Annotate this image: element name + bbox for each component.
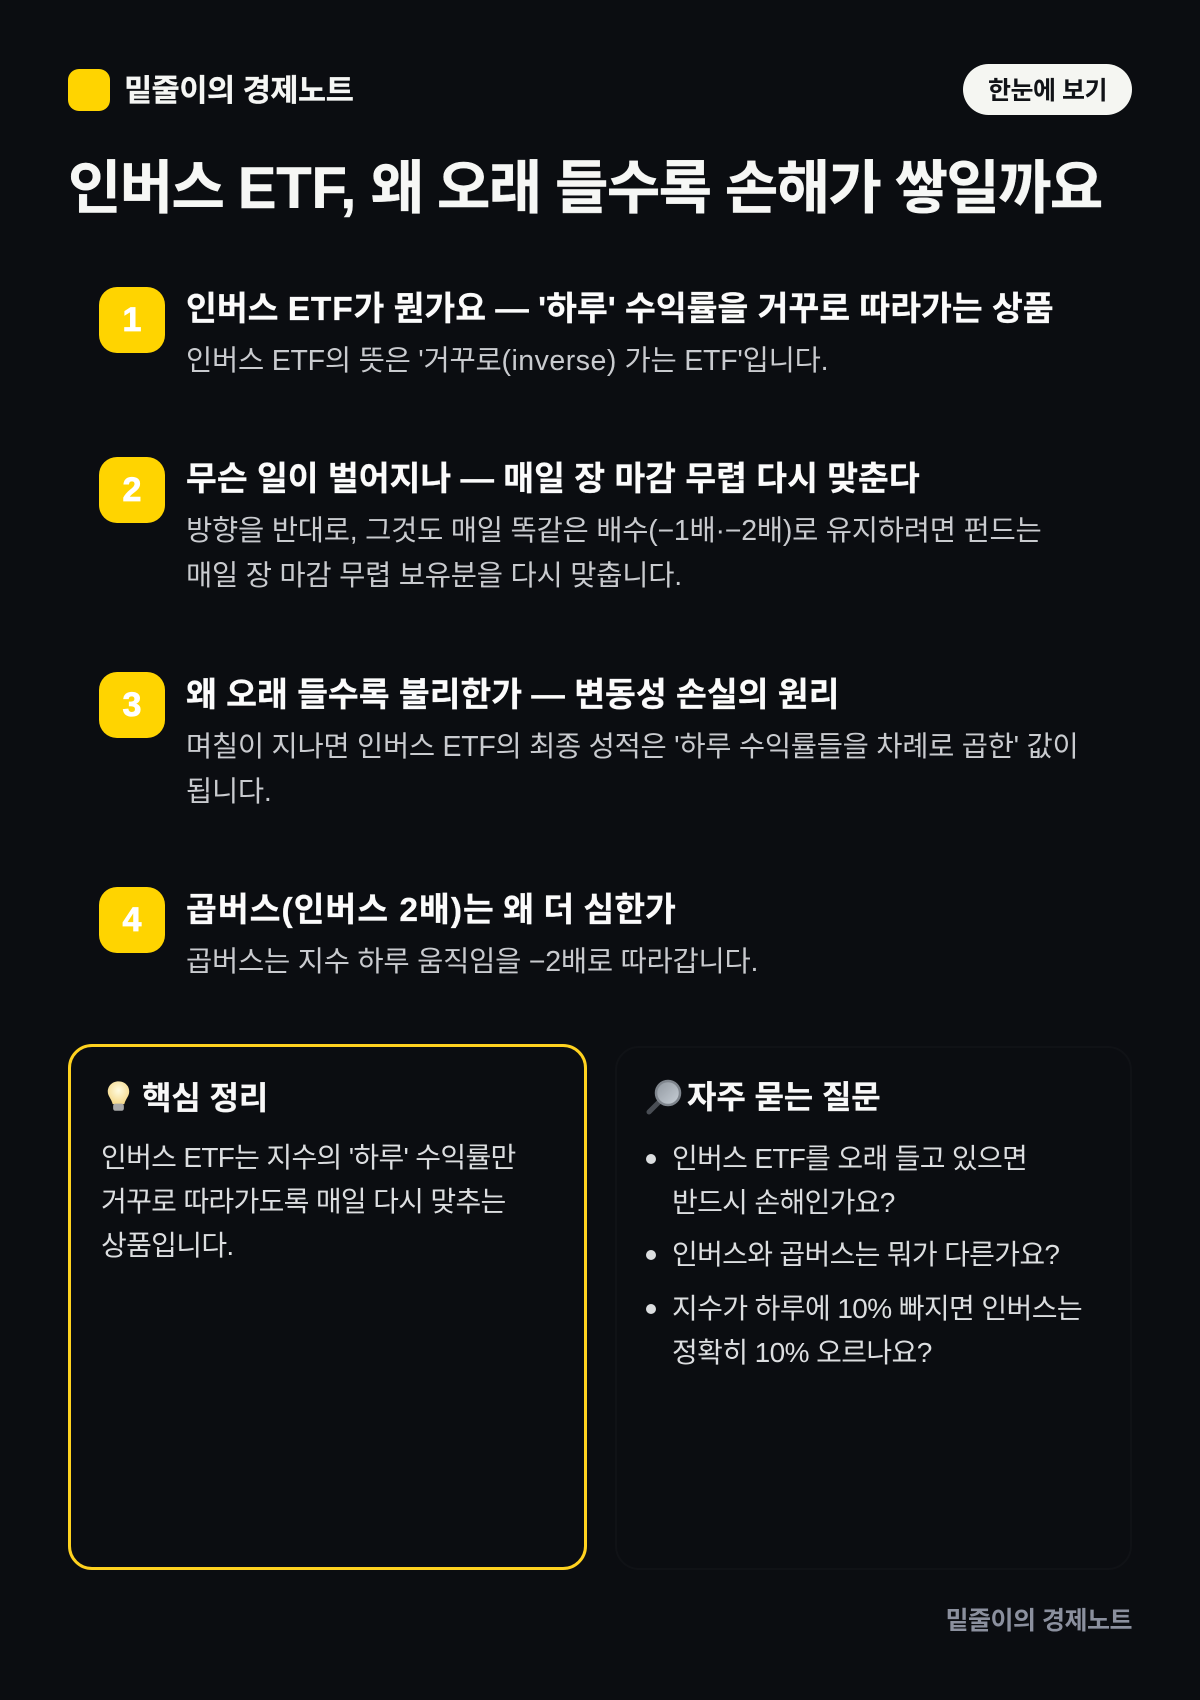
step 1 number [99, 287, 165, 353]
question text [672, 1293, 1082, 1368]
question text: 인버스와 곱버스는 뭐가 다른가요? [672, 1239, 1059, 1270]
icon: light bulb [108, 1081, 130, 1111]
pill badge [963, 64, 1132, 115]
step 3 heading: 왜 오래 들수록 불리한가 — 변동성 손실의 원리 [186, 677, 839, 714]
FAQ bullet 2 [646, 1239, 1059, 1270]
question text: 반드시 손해인가요? [672, 1187, 895, 1218]
panel: FAQ [615, 1046, 1132, 1570]
question text: 정확히 10% 오르나요? [672, 1337, 932, 1368]
step 4 heading: 곱버스(인버스 2배)는 왜 더 심한가 [186, 892, 676, 929]
step 4 number: 4 [123, 901, 141, 939]
step 3 text: 됩니다. [186, 776, 272, 808]
icon: magnifying glass [646, 1080, 682, 1114]
summary text: 상품입니다. [101, 1230, 234, 1261]
step 1 text: 인버스 ETF의 뜻은 '거꾸로(inverse) 가는 ETF'입니다. [186, 345, 828, 377]
step 3 number [99, 672, 165, 738]
step 3 number: 3 [123, 686, 141, 724]
question text: 인버스 ETF를 오래 들고 있으면 [672, 1143, 1027, 1174]
brand name: 밑줄이의 경제노트 [124, 74, 353, 108]
step 2 text [186, 515, 1042, 592]
step 2 heading: 무슨 일이 벌어지나 — 매일 장 마감 무렵 다시 맞춘다 [186, 461, 920, 498]
pill badge: 한눈에 보기 [988, 77, 1107, 105]
summary text: 인버스 ETF는 지수의 '하루' 수익률만 [101, 1142, 516, 1173]
step 1 number: 1 [123, 301, 141, 339]
panel: key summary [68, 1044, 587, 1570]
summary text: 거꾸로 따라가도록 매일 다시 맞추는 [101, 1186, 506, 1217]
bullet [646, 1304, 656, 1314]
summary text [101, 1142, 516, 1261]
brand logo mark [68, 69, 110, 111]
title: 인버스 ETF, 왜 오래 들수록 손해가 쌓일까요 [68, 156, 1102, 221]
bullet [646, 1250, 656, 1260]
panel heading: 핵심 정리 [142, 1080, 268, 1116]
step 3 text: 며칠이 지나면 인버스 ETF의 최종 성적은 '하루 수익률들을 차례로 곱한' 값이 [186, 731, 1078, 763]
FAQ bullet 1 [646, 1143, 1027, 1218]
step 2 number: 2 [123, 471, 141, 509]
panel heading: 자주 묻는 질문 [687, 1079, 881, 1115]
bullet [646, 1154, 656, 1164]
step 3 text [186, 731, 1078, 808]
step 2 text: 매일 장 마감 무렵 보유분을 다시 맞춥니다. [186, 560, 682, 592]
FAQ bullet 3 [646, 1293, 1082, 1368]
step 2 text: 방향을 반대로, 그것도 매일 똑같은 배수(−1배·−2배)로 유지하려면 펀드는 [186, 515, 1042, 547]
step 4 text: 곱버스는 지수 하루 움직임을 −2배로 따라갑니다. [186, 946, 758, 978]
step 1 heading: 인버스 ETF가 뭔가요 — '하루' 수익률을 거꾸로 따라가는 상품 [186, 291, 1054, 328]
step 4 number [99, 887, 165, 953]
footer brand: 밑줄이의 경제노트 [946, 1607, 1132, 1635]
question text [672, 1143, 1027, 1218]
step 2 number [99, 457, 165, 523]
question text: 지수가 하루에 10% 빠지면 인버스는 [672, 1293, 1082, 1324]
